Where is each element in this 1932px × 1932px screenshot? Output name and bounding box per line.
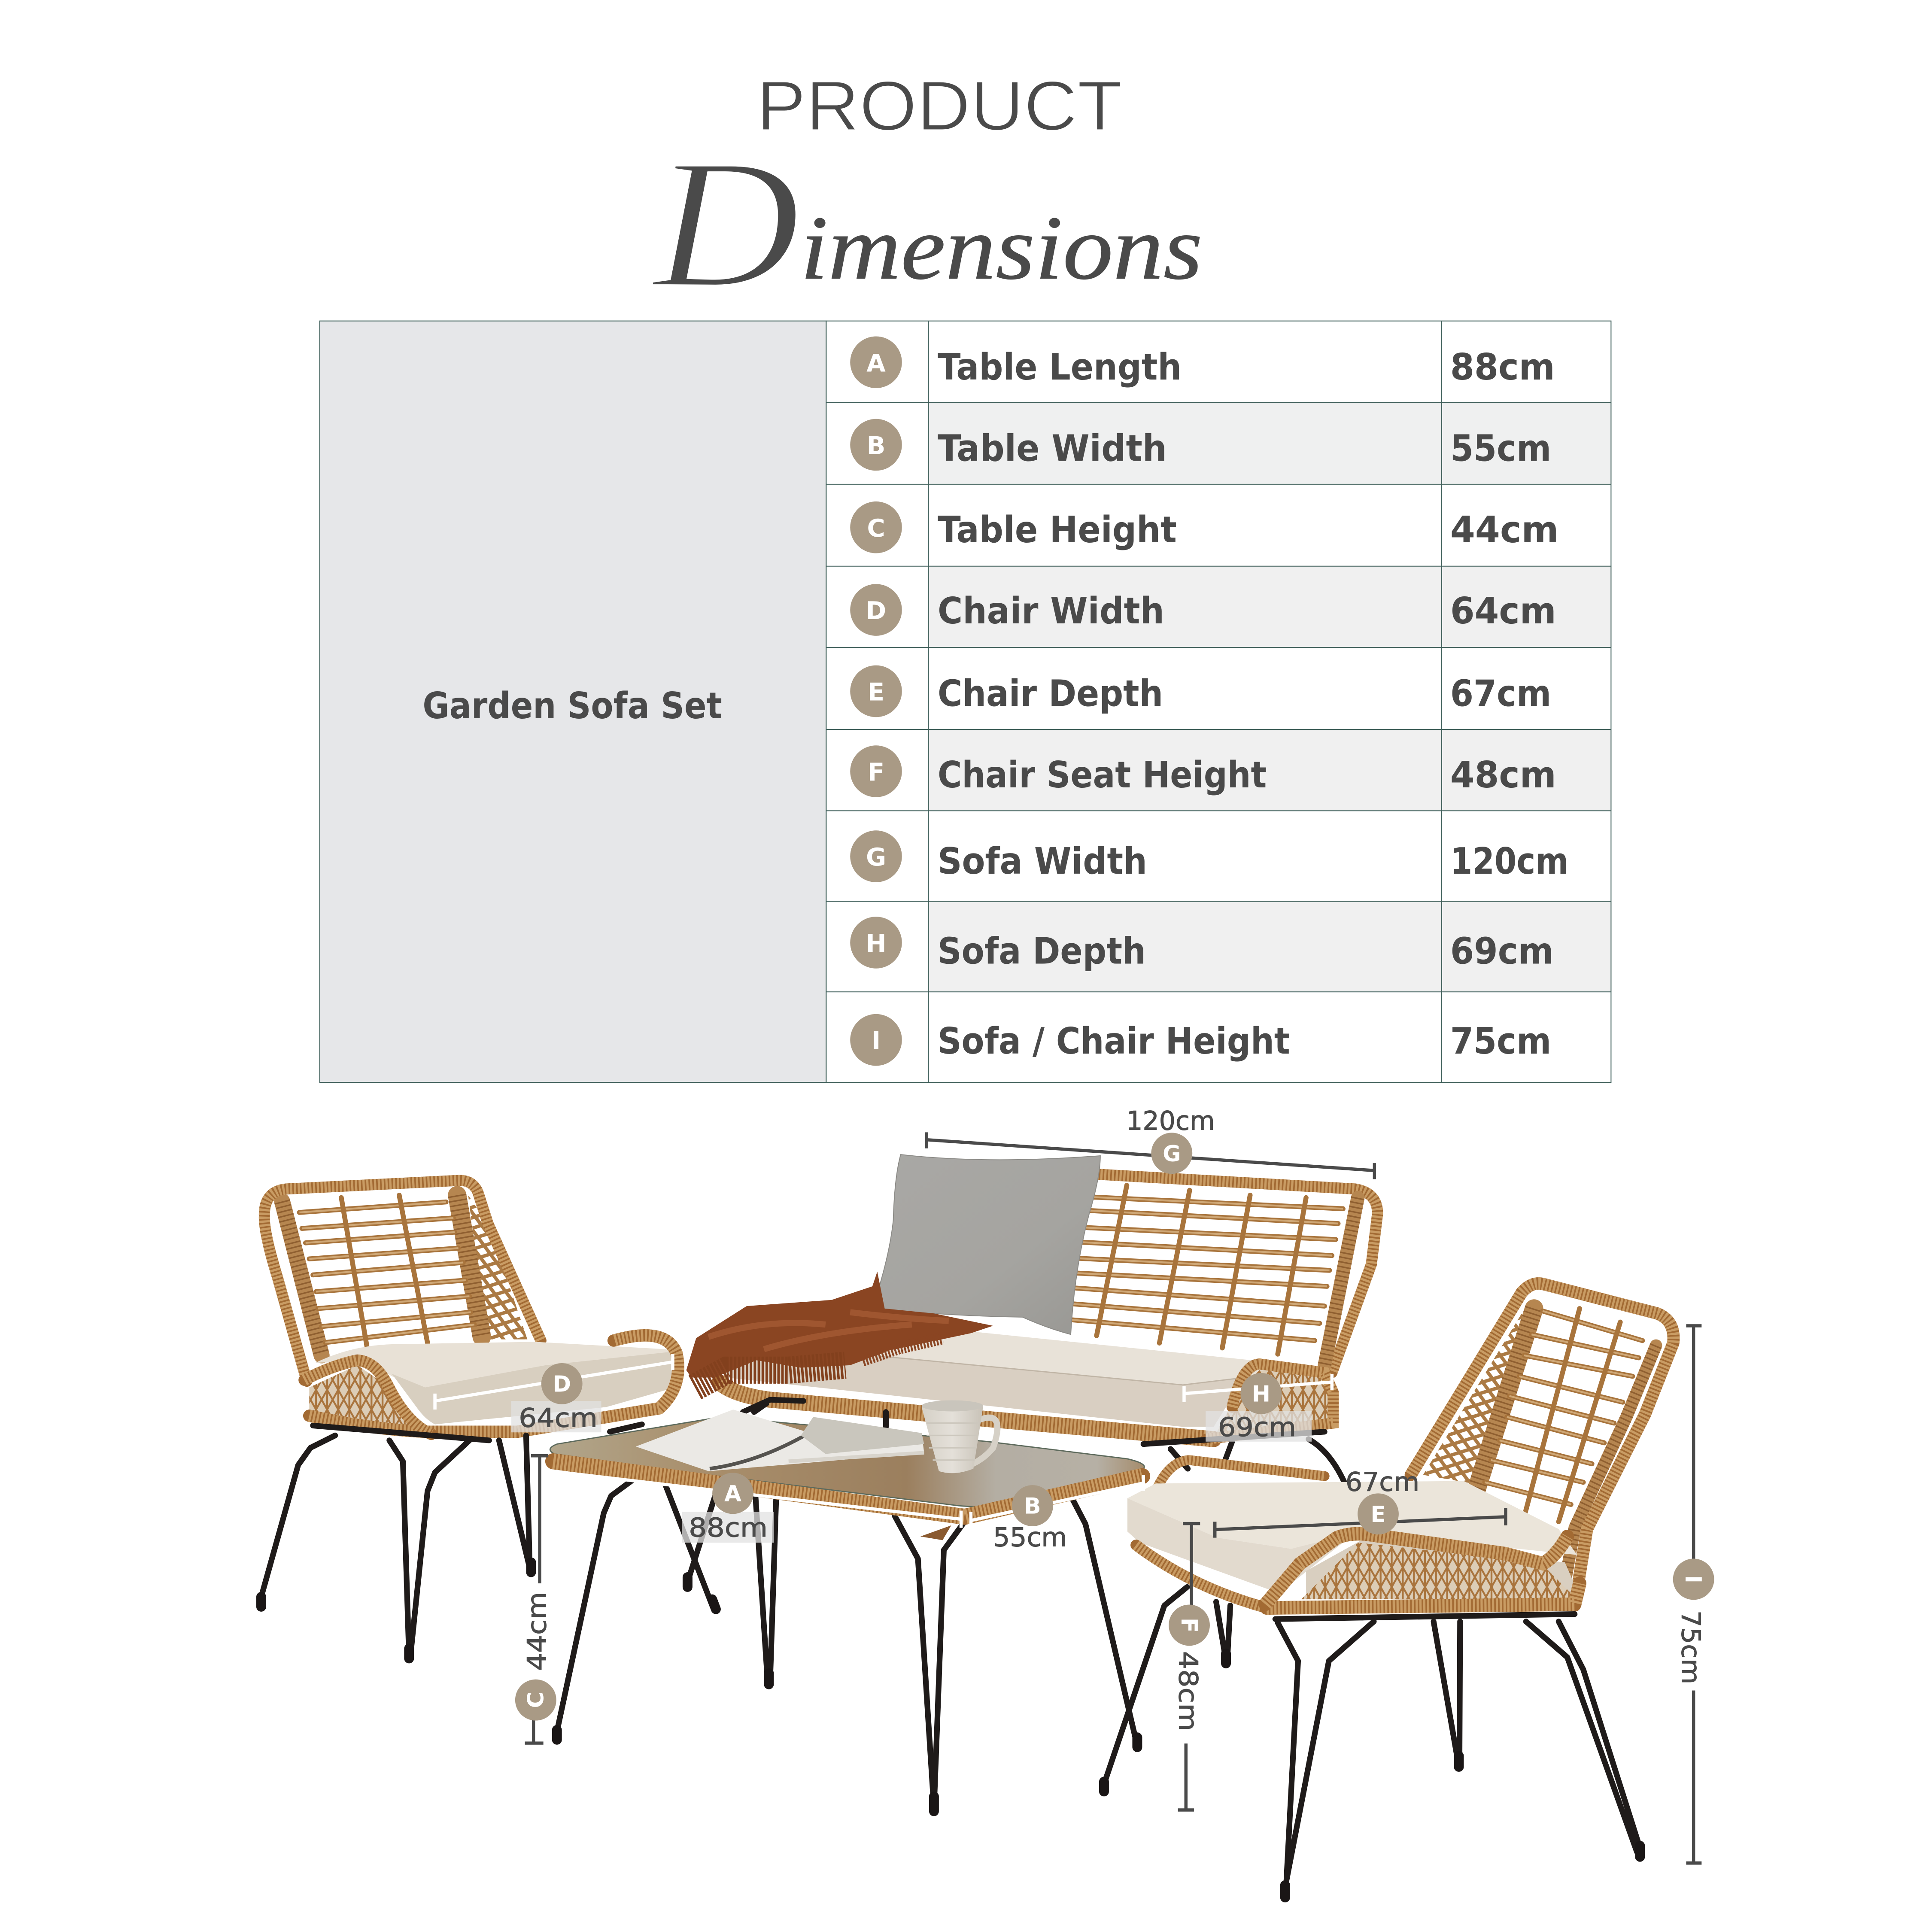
row I: sofa and chair height: I [872,1027,881,1055]
row I: sofa and chair height [850,1014,1551,1066]
row B: table width: 55cm [1450,427,1551,469]
row I: sofa and chair height: Sofa / Chair Height [938,1020,1290,1062]
dimension C: table height [515,1456,556,1743]
dimension I: sofa and chair height: 75cm [1675,1610,1705,1684]
dimension D: chair width [435,1354,673,1433]
row C: table height: Table Height [938,508,1177,551]
row A: table length: A [866,349,886,377]
row D: chair width: Chair Width [938,589,1164,632]
row D: chair width: 64cm [1450,589,1556,632]
row G: sofa width: G [866,843,886,872]
throw blanket [687,1272,993,1388]
left chair legs [261,1425,642,1657]
dimension I: sofa and chair height: I [1680,1575,1706,1583]
row E: chair depth: E [868,678,884,707]
row E: chair depth: 67cm [1450,672,1551,714]
title [650,67,1203,326]
row B: table width: B [867,431,885,460]
magazine [636,1410,924,1471]
dimension B: table width: B [1024,1494,1041,1519]
row C: table height: 44cm [1450,508,1558,551]
dimension D: chair width: D [553,1372,571,1397]
table rim [553,1461,1142,1517]
row A: table length: 88cm [1450,346,1555,388]
dimension I: sofa and chair height [1673,1326,1714,1863]
row C: table height [850,501,1558,553]
row D: chair width [850,584,1556,636]
left chair feet [261,1562,531,1659]
row G: sofa width [850,830,1568,882]
dimension E: chair depth: 67cm [1346,1467,1419,1498]
row D: chair width: D [866,596,886,625]
row H: sofa depth: 69cm [1450,930,1554,972]
heading: Dimensions: imensions [800,197,1203,298]
row H: sofa depth: Sofa Depth [938,930,1146,972]
dimension A: table length [552,1471,961,1543]
row A: table length [850,336,1555,388]
panel: product name cell [320,321,826,1082]
dimension G: sofa width: 120cm [1126,1106,1215,1136]
seat cushion [1127,1481,1580,1598]
table row shading and grid [826,321,1612,1082]
dimension C: table height: C [523,1692,549,1708]
row H: sofa depth: H [866,929,887,958]
sofa legs [743,1400,1346,1485]
dimension D: chair width: 64cm [519,1403,598,1433]
row E: chair depth: Chair Depth [938,672,1163,714]
row I: sofa and chair height: 75cm [1450,1020,1551,1062]
dimensions table [320,321,1612,1082]
cushion [726,1324,1324,1427]
row B: table width [850,419,1551,471]
row F: chair seat height [850,745,1556,797]
row F: chair seat height: 48cm [1450,753,1556,796]
dimension G: sofa width: G [1163,1141,1181,1167]
furniture: sofa [687,1154,1378,1485]
dimension F: chair seat height: 48cm [1173,1651,1203,1731]
row A: table length: Table Length [938,346,1182,388]
row H: sofa depth [850,917,1554,972]
furniture: left chair [261,1180,678,1659]
row C: table height: C [867,514,885,543]
row G: sofa width: Sofa Width [938,840,1147,882]
dimension C: table height: 44cm [522,1592,552,1671]
dimension H: sofa depth [1184,1373,1332,1443]
row G: sofa width: 120cm [1450,840,1568,882]
dimension A: table length: A [724,1481,741,1507]
dimension F: chair seat height [1169,1524,1210,1810]
right chair legs [1275,1614,1641,1894]
panel: product name cell: Garden Sofa Set [422,684,722,727]
mug [922,1400,997,1473]
dimension E: chair depth: E [1370,1502,1386,1528]
dimension B: table width [971,1475,1143,1553]
row F: chair seat height: Chair Seat Height [938,753,1267,796]
row B: table width: Table Width [938,427,1167,469]
dimension H: sofa depth: 69cm [1218,1413,1296,1443]
furniture: right chair [1103,1283,1674,1898]
dimension G: sofa width [927,1106,1374,1179]
row F: chair seat height: F [868,758,884,787]
row E: chair depth [850,665,1551,717]
seat cushion [316,1342,675,1425]
dimension E: chair depth [1215,1467,1506,1538]
furniture: coffee table [550,1400,1144,1811]
dimension F: chair seat height: F [1176,1618,1202,1633]
pillow [872,1154,1100,1334]
dimension A: table length: 88cm [689,1513,768,1543]
dimension B: table width: 55cm [993,1523,1067,1553]
right chair feet [1285,1756,1640,1898]
dimension H: sofa depth: H [1252,1382,1270,1407]
heading: Dimensions: D [650,122,800,326]
heading: PRODUCT: PRODUCT [756,67,1122,145]
